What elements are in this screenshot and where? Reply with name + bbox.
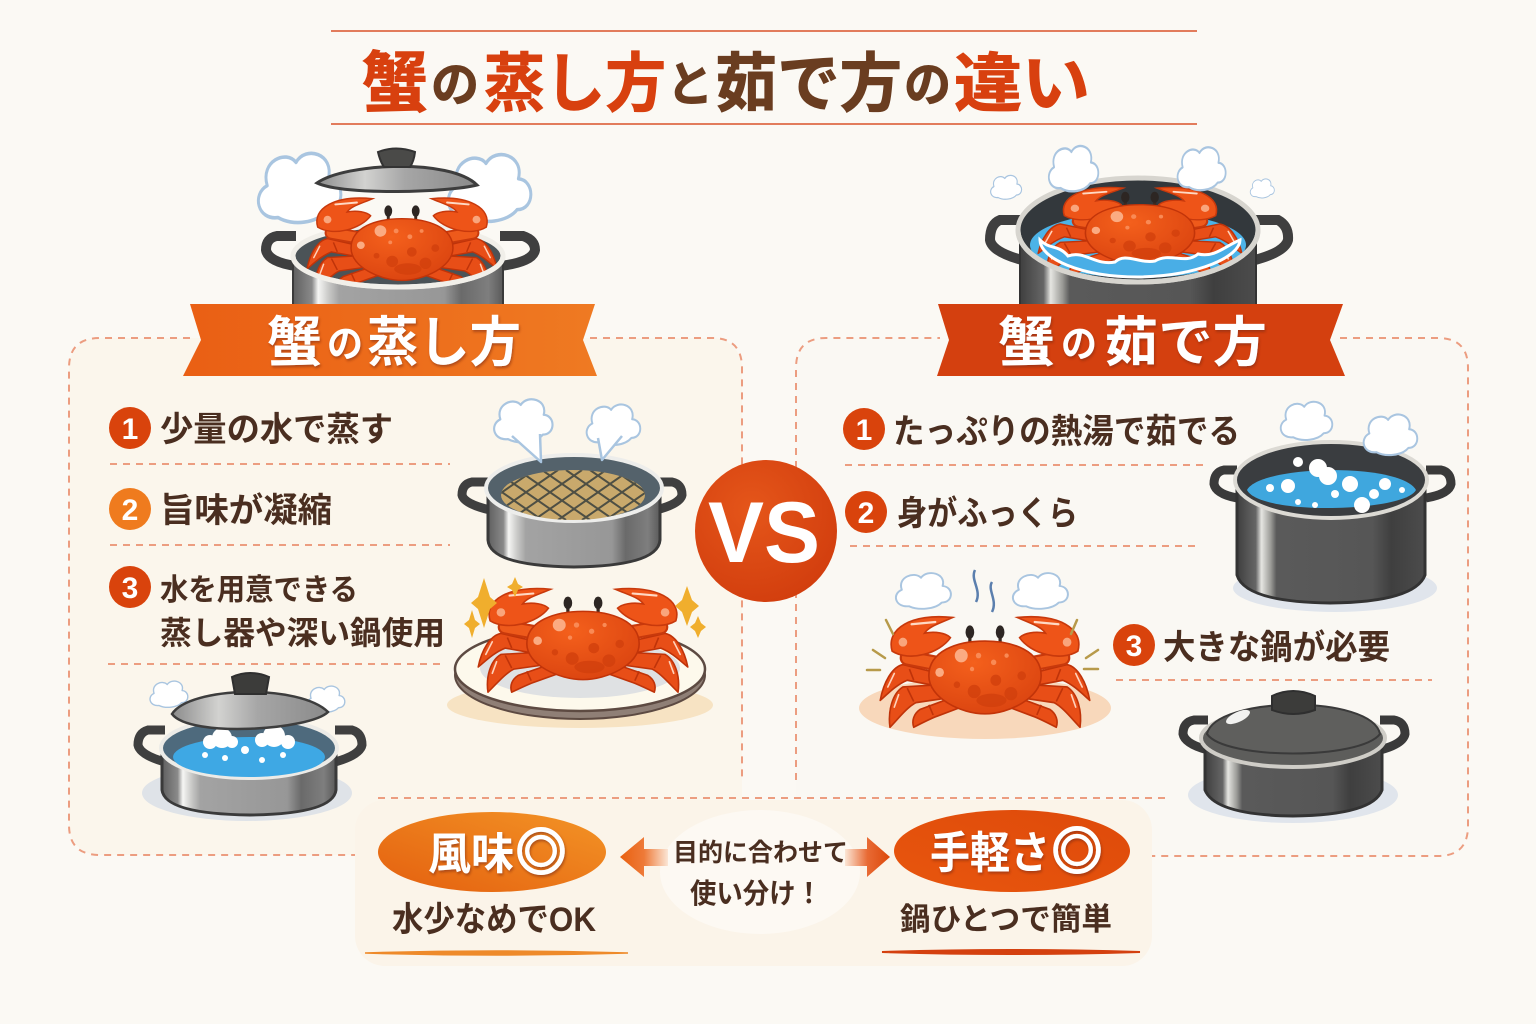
centre message (673, 839, 848, 909)
handles (138, 730, 362, 762)
steaming point 2: 旨味が凝縮 (160, 491, 332, 530)
steam clouds (258, 153, 531, 223)
pot handles (266, 236, 535, 266)
knob (1272, 691, 1315, 714)
steam clouds (991, 146, 1274, 199)
pot rim front (293, 256, 503, 287)
steaming point 3: 水を用意できる (160, 574, 358, 607)
title: 茹で方 (715, 48, 902, 120)
badge: ease: ◎ (1052, 824, 1102, 880)
lid highlight (1224, 707, 1252, 727)
steaming point 1: 少量の水で蒸す (160, 411, 393, 449)
water (1030, 212, 1246, 278)
steaming point 2: 2 (122, 494, 138, 527)
steaming rack (501, 470, 645, 520)
badge: ease (894, 810, 1130, 892)
arrow: left (620, 837, 668, 877)
steaming point 3: 3 (122, 572, 138, 605)
icon: crab on plate (447, 577, 713, 728)
pot handles (990, 220, 1288, 260)
badge: flavour: 風味 (428, 830, 514, 879)
bubbles (1266, 457, 1405, 513)
illustration: steaming pot with crab (258, 148, 535, 305)
handles (1214, 470, 1451, 498)
shadow (859, 677, 1111, 739)
centre message: 使い分け！ (690, 878, 822, 909)
ease note (882, 902, 1140, 954)
crab (880, 617, 1090, 727)
pot rim (1018, 178, 1258, 282)
crab (307, 198, 497, 292)
impact lines (867, 620, 1098, 670)
icon: large lidded pot (1183, 691, 1405, 823)
water (173, 737, 325, 777)
ribbon: boiling heading: の (1061, 324, 1097, 366)
shadow (447, 682, 713, 728)
shadow (1188, 767, 1398, 823)
boiling point 2: 身がふっくら (897, 494, 1078, 533)
arrow: right (845, 837, 890, 877)
body (162, 745, 336, 815)
steam (1281, 402, 1417, 455)
knob (232, 673, 269, 694)
panel: summary band (355, 800, 1152, 966)
pot body (1020, 232, 1256, 305)
panel: boiling background (796, 338, 1468, 856)
title: 違い (954, 48, 1090, 120)
pot rim front (1018, 230, 1258, 282)
body (1205, 738, 1382, 816)
rim (486, 455, 662, 521)
badge: flavour (378, 812, 606, 892)
badge: flavour: ◎ (516, 825, 566, 881)
bubbles (202, 725, 295, 763)
steam (896, 573, 1068, 609)
VS badge (695, 460, 837, 602)
plate (455, 627, 705, 719)
boiling point 3 (1113, 624, 1390, 667)
lid dome (1207, 705, 1380, 754)
crab (478, 589, 688, 692)
handles (1183, 720, 1405, 750)
VS badge: VS (708, 485, 820, 581)
boiling point 3: 3 (1126, 630, 1142, 663)
summary center blob (660, 810, 860, 934)
illustration: boiling pot with crab (990, 146, 1288, 305)
shadow (142, 765, 352, 821)
ribbon: steaming heading: の (327, 324, 363, 366)
steam (494, 399, 640, 462)
flavour note (365, 901, 628, 955)
title: 蟹 (362, 46, 428, 120)
boiling point 3: 大きな鍋が必要 (1163, 628, 1390, 667)
foam (1040, 240, 1240, 277)
badge: ease: 手軽さ (930, 829, 1050, 878)
title: の (904, 59, 951, 112)
boiling point 1: 1 (856, 414, 872, 447)
icon: lidded pot with boiling water (138, 673, 362, 821)
body (1237, 480, 1425, 603)
icon: steamer pot (438, 399, 686, 567)
icon: startled boiled crab (859, 570, 1111, 739)
icon: tall pot with boiling water (1214, 402, 1451, 612)
panel: steaming background (69, 338, 742, 855)
rim (1235, 442, 1427, 518)
title: 蒸し方 (484, 48, 666, 120)
ribbon: boiling heading: 茹で方 (1104, 313, 1267, 373)
water (1247, 470, 1416, 508)
pot body (293, 256, 503, 305)
boiling point 1: たっぷりの熱湯で茹でる (893, 413, 1240, 451)
steaming point 2 (109, 488, 332, 530)
heat wisps (974, 570, 994, 612)
steaming point 3 (109, 566, 445, 651)
handles (462, 482, 682, 510)
ribbon: boiling heading: 蟹 (998, 313, 1055, 373)
ribbon: steaming heading: 蒸し方 (367, 313, 521, 373)
lid (317, 166, 477, 192)
ribbon: steaming heading: 蟹 (267, 313, 322, 373)
ribbon: boiling heading (937, 304, 1345, 376)
ribbon: steaming heading (183, 304, 597, 376)
flavour note: 水少なめでOK (392, 901, 596, 939)
sparkles (464, 577, 706, 638)
boiling point 2 (845, 491, 1078, 533)
crab (1038, 187, 1242, 275)
lid knob (378, 148, 415, 167)
boiling point 2: 2 (858, 497, 874, 530)
steam (150, 681, 345, 712)
steaming point 1: 1 (122, 413, 138, 446)
centre message: 目的に合わせて (673, 839, 848, 867)
panel outlines (69, 338, 1468, 856)
ease note: 鍋ひとつで簡単 (900, 902, 1112, 937)
steaming point 3: 蒸し器や深い鍋使用 (160, 615, 445, 651)
title (331, 31, 1197, 124)
rim (1201, 709, 1385, 767)
shadow (1233, 564, 1437, 612)
pot rim (293, 225, 503, 287)
lid (172, 692, 328, 729)
rim (161, 718, 337, 778)
title: の (431, 59, 479, 112)
body (488, 490, 660, 567)
title: と (667, 59, 713, 112)
